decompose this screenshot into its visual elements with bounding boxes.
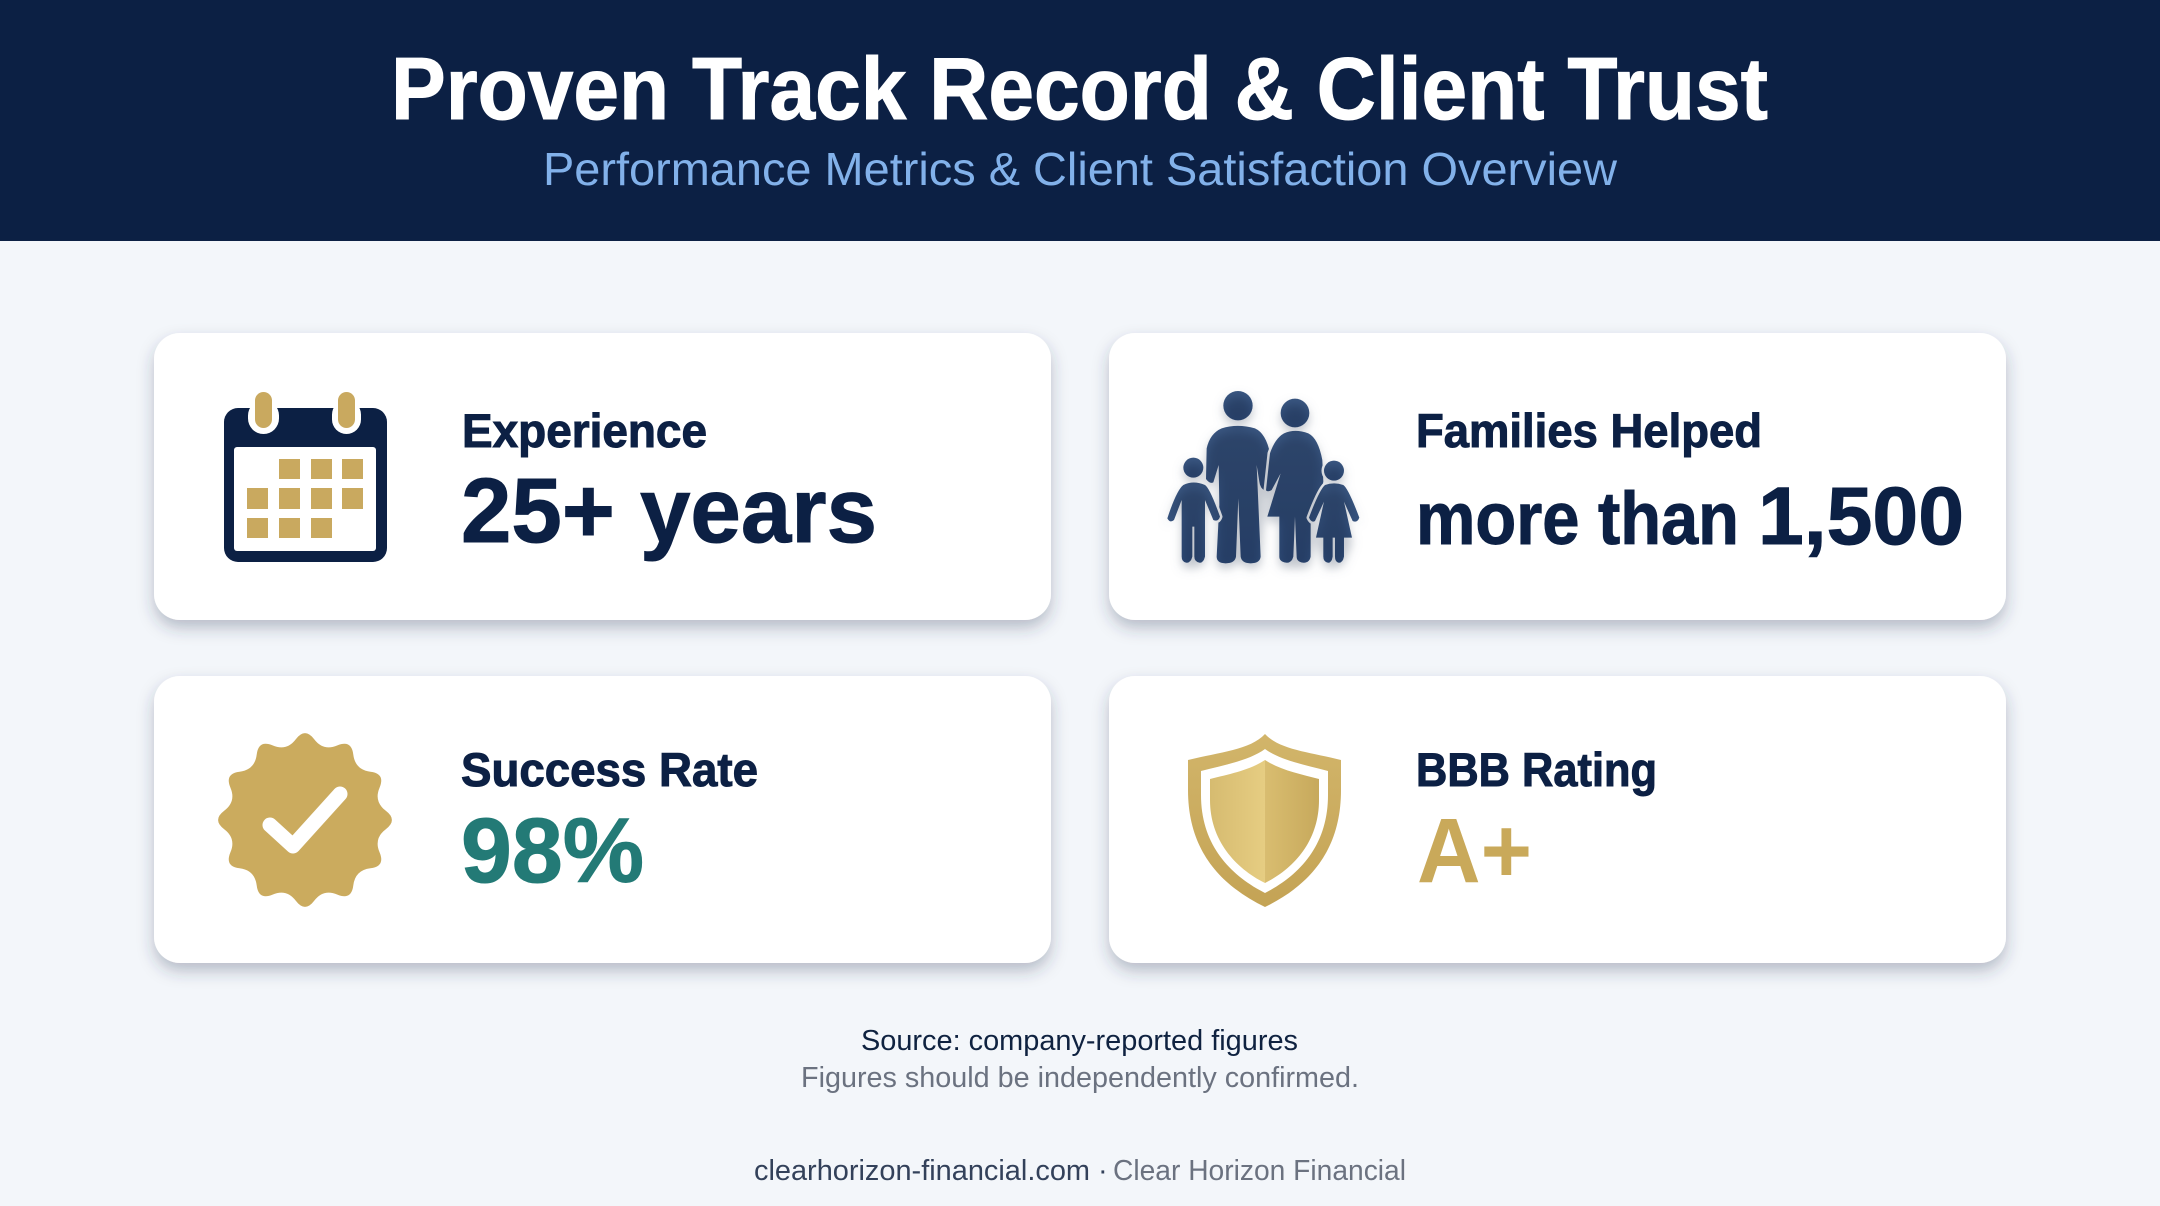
icon: calendar (224, 392, 387, 562)
value: more than 1,500: 1,500 (1758, 471, 1964, 562)
panel: experience (154, 333, 1051, 620)
footer: Clear Horizon Financial (1113, 1155, 1406, 1187)
footer (754, 1155, 1406, 1187)
value: more than 1,500 (1416, 471, 1964, 562)
value: 98%: 98% (461, 800, 644, 902)
card background (1109, 333, 2006, 620)
source note: Source: company-reported figures (861, 1025, 1298, 1057)
footer: clearhorizon-financial.com (754, 1155, 1090, 1187)
header band (0, 0, 2160, 241)
footer: · (1098, 1155, 1108, 1187)
label: families helped: Families Helped (1416, 404, 1762, 457)
label: experience: Experience (462, 404, 707, 457)
value: more than 1,500: more than (1416, 477, 1739, 560)
subtitle: Performance Metrics & Client Satisfaction Overview (543, 143, 1618, 195)
card background (1109, 676, 2006, 963)
panel: success rate (154, 676, 1051, 963)
value: A+: A+ (1417, 800, 1532, 902)
label: success rate: Success Rate (461, 743, 758, 796)
value: 25+ years: 25+ years (461, 460, 877, 562)
icon: check badge (218, 733, 392, 907)
source note: Figures should be independently confirmed. (801, 1062, 1359, 1094)
title: Proven Track Record & Client Trust (391, 39, 1768, 138)
card background (154, 676, 1051, 963)
label: bbb rating: BBB Rating (1416, 743, 1657, 796)
icon: family (1167, 391, 1359, 569)
source note (801, 1025, 1359, 1094)
panel: families helped (1109, 333, 2006, 620)
card background (154, 333, 1051, 620)
icon: shield (1188, 734, 1341, 907)
panel: bbb rating (1109, 676, 2006, 963)
